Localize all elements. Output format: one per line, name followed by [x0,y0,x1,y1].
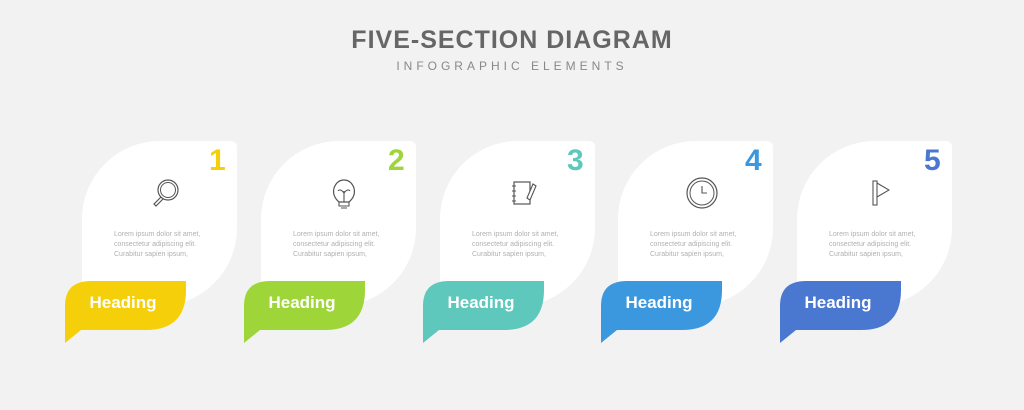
subtitle: INFOGRAPHIC ELEMENTS [396,59,628,73]
text block: consectetur adipiscing elit. [114,241,196,248]
text block: consectetur adipiscing elit. [829,241,911,248]
icon: flag [872,180,890,206]
section 2 [244,141,416,343]
icon: clock [686,177,718,209]
section 1 [65,141,237,343]
text block [472,230,558,258]
heading tab: Heading [447,293,515,312]
text block: consectetur adipiscing elit. [650,241,732,248]
heading tab [601,281,722,343]
title: FIVE-SECTION DIAGRAM [351,26,673,54]
text block [829,230,915,258]
text block [293,230,379,258]
heading tab: Heading [625,293,693,312]
icon: magnifier [153,179,179,207]
text block [114,230,200,258]
section 4 [601,141,773,343]
text block: Curabitur sapien ipsum, [114,251,188,258]
heading tab [65,281,186,343]
text block: consectetur adipiscing elit. [472,241,554,248]
text block: consectetur adipiscing elit. [293,241,375,248]
text block: Lorem ipsum dolor sit amet, [650,231,736,238]
heading tab [423,281,544,343]
heading tab [244,281,365,343]
text block: Curabitur sapien ipsum, [472,251,546,258]
text block [650,230,736,258]
text block: Lorem ipsum dolor sit amet, [114,231,200,238]
heading tab: Heading [804,293,872,312]
heading tab [780,281,901,343]
number 1: 1 [209,144,226,177]
number 4: 4 [745,144,762,177]
section 5 [780,141,952,343]
text block: Lorem ipsum dolor sit amet, [472,231,558,238]
text block: Curabitur sapien ipsum, [293,251,367,258]
heading tab: Heading [89,293,157,312]
icon: lightbulb [332,179,356,208]
icon: notepad [512,181,537,205]
text block: Lorem ipsum dolor sit amet, [293,231,379,238]
text block: Curabitur sapien ipsum, [829,251,903,258]
section 3 [423,141,595,343]
number 3: 3 [567,144,584,177]
heading tab: Heading [268,293,336,312]
number 2: 2 [388,144,405,177]
text block: Curabitur sapien ipsum, [650,251,724,258]
text block: Lorem ipsum dolor sit amet, [829,231,915,238]
number 5: 5 [924,144,941,177]
